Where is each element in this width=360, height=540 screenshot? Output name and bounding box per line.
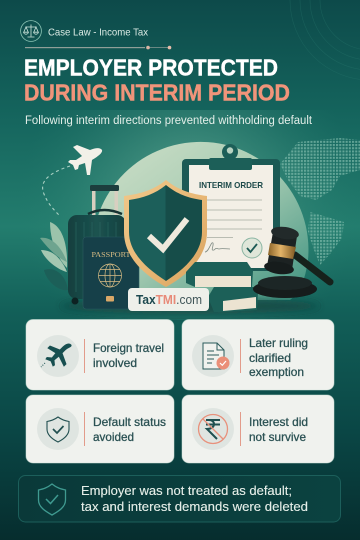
label: [249, 336, 308, 379]
label: avoided: [93, 430, 134, 444]
icon: shield check outline: [38, 484, 66, 515]
label: Interest did: [249, 415, 308, 429]
icon: shield check: [37, 408, 79, 450]
clipboard: interim order: [182, 144, 280, 271]
label: [93, 341, 164, 370]
gavel: [253, 225, 330, 298]
world map dots: [280, 138, 360, 265]
leaves: [40, 222, 68, 290]
header divider with dots: [25, 46, 171, 49]
label: not survive: [249, 430, 306, 444]
category label: Case Law - Income Tax: [48, 26, 149, 38]
panel: later ruling: [182, 320, 334, 390]
ground shadow: [60, 298, 320, 314]
label: Default status: [93, 415, 166, 429]
shield with check: [124, 180, 207, 287]
label: [93, 415, 166, 444]
label: clarified: [249, 351, 291, 365]
conclusion banner: [18, 476, 340, 522]
label: exemption: [249, 365, 304, 379]
TaxTMI badge: TaxTMI.com: [136, 292, 202, 307]
icon: airplane: [37, 335, 79, 377]
label: Later ruling: [249, 336, 308, 350]
title: DURING INTERIM PERIOD: [24, 80, 290, 106]
books: [186, 262, 258, 312]
panel: default status: [26, 395, 174, 463]
icon: scales of justice: [21, 21, 41, 41]
hero illustration: [40, 138, 360, 314]
clipboard: interim order: INTERIM ORDER: [199, 181, 263, 190]
subtitle: Following interim directions prevented withholding default: [25, 115, 313, 127]
title: [24, 54, 290, 106]
label: Foreign travel: [93, 341, 164, 355]
title: EMPLOYER PROTECTED: [24, 54, 278, 80]
background disc: [92, 142, 308, 300]
icon: crossed rupee: [192, 408, 234, 450]
suitcase: [68, 185, 126, 304]
label: involved: [93, 356, 137, 370]
header: category tag: [21, 21, 149, 41]
TaxTMI badge: [128, 288, 209, 311]
conclusion text: [81, 484, 308, 514]
conclusion text: tax and interest demands were deleted: [81, 500, 308, 514]
panel: foreign travel: [26, 320, 174, 390]
label: [249, 415, 308, 444]
passport: PASSPORT: [92, 251, 131, 259]
panel: interest: [182, 395, 334, 463]
conclusion text: Employer was not treated as default;: [81, 484, 292, 498]
icon: document with check: [192, 335, 234, 377]
passport: [83, 237, 139, 309]
icon: airplane with dashed trail: [43, 145, 102, 216]
